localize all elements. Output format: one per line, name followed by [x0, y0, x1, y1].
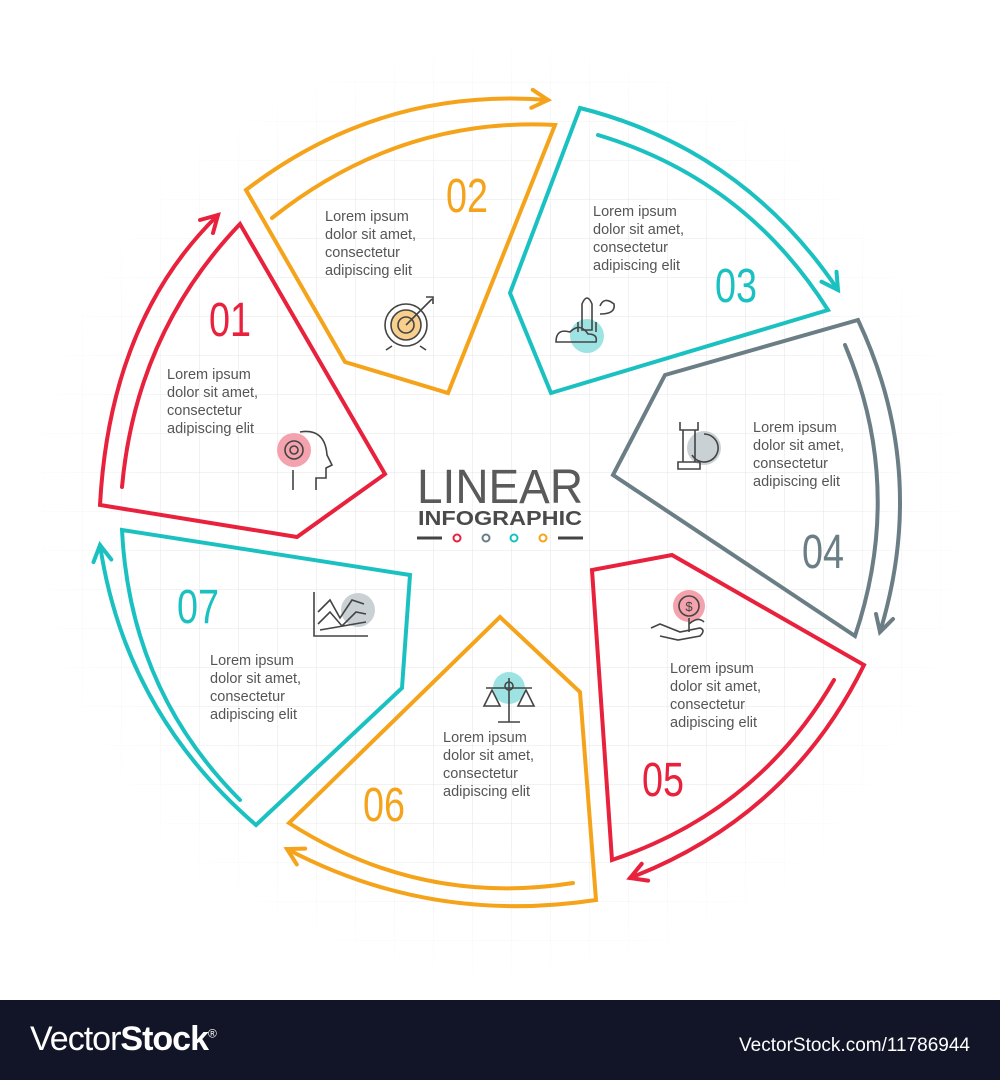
text blocks: consectetur [593, 240, 668, 256]
segment 05 [592, 555, 864, 881]
text blocks: dolor sit amet, [167, 385, 258, 401]
text blocks: consectetur [670, 697, 745, 713]
text blocks: consectetur [753, 456, 828, 472]
text blocks [167, 204, 844, 800]
text blocks: Lorem ipsum [443, 730, 527, 746]
text blocks: Lorem ipsum [167, 367, 251, 383]
text blocks: dolor sit amet, [210, 671, 301, 687]
numbers: 02 [446, 170, 488, 223]
numbers: 06 [363, 779, 405, 832]
numbers: 05 [642, 754, 684, 807]
text blocks: Lorem ipsum [593, 204, 677, 220]
icon: chart arrows [314, 592, 375, 636]
text blocks: dolor sit amet, [443, 748, 534, 764]
text blocks: Lorem ipsum [670, 661, 754, 677]
text blocks: dolor sit amet, [670, 679, 761, 695]
footer: VectorStock® [30, 1020, 216, 1058]
icon: scales [484, 672, 534, 722]
main infographic [69, 79, 931, 942]
text blocks: adipiscing elit [593, 258, 680, 274]
numbers: 03 [715, 260, 757, 313]
segment 06 [287, 617, 596, 906]
text blocks: adipiscing elit [325, 263, 412, 279]
text blocks: consectetur [210, 689, 285, 705]
text blocks: Lorem ipsum [210, 653, 294, 669]
center title: INFOGRAPHIC [418, 508, 582, 530]
icon: rocket [556, 298, 614, 353]
text blocks: consectetur [443, 766, 518, 782]
text blocks: dolor sit amet, [325, 227, 416, 243]
text blocks: adipiscing elit [443, 784, 530, 800]
segment 07 [94, 530, 410, 825]
text blocks: dolor sit amet, [593, 222, 684, 238]
text blocks: Lorem ipsum [325, 209, 409, 225]
segment 03 [510, 108, 838, 393]
numbers: 01 [209, 294, 251, 347]
icons [277, 297, 721, 722]
footer [0, 1000, 1000, 1080]
segment 04 [613, 320, 900, 636]
icon: hand with coin: $ [685, 599, 693, 614]
text blocks: dolor sit amet, [753, 438, 844, 454]
segment 01 [100, 215, 385, 537]
center title [417, 461, 583, 542]
text blocks: adipiscing elit [753, 474, 840, 490]
text blocks: adipiscing elit [167, 421, 254, 437]
footer: VectorStock.com/11786944 [739, 1035, 970, 1056]
icon: chess rook with pie [678, 422, 721, 469]
text blocks: Lorem ipsum [753, 420, 837, 436]
center title: LINEAR [417, 461, 583, 514]
text blocks: adipiscing elit [670, 715, 757, 731]
text blocks: adipiscing elit [210, 707, 297, 723]
icon: hand with coin [651, 590, 705, 640]
numbers [177, 170, 844, 832]
icon: head with gear [277, 431, 332, 490]
icon: target [385, 297, 433, 350]
numbers: 07 [177, 581, 219, 634]
segment 02 [246, 90, 555, 393]
text blocks: consectetur [325, 245, 400, 261]
text blocks: consectetur [167, 403, 242, 419]
numbers: 04 [802, 526, 844, 579]
